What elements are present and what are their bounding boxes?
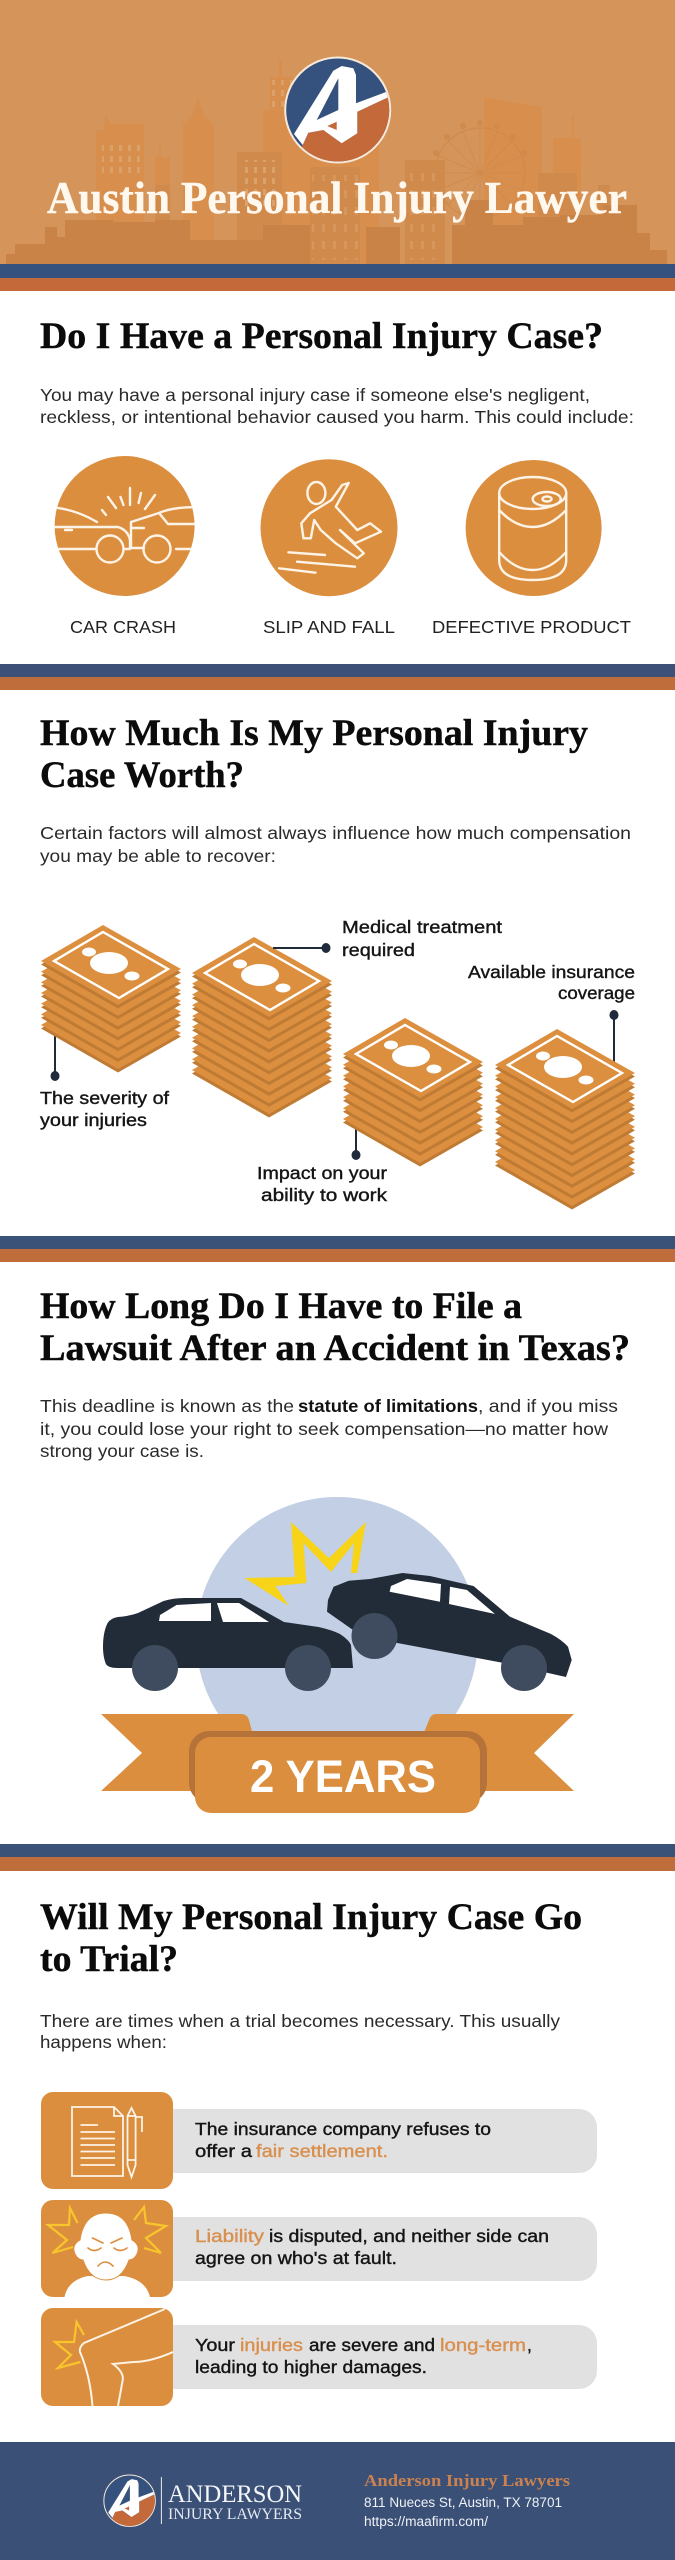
card text: is disputed, and neither side can (269, 2226, 549, 2246)
card text: Your (195, 2335, 235, 2355)
heading: How Much Is My Personal Injury (40, 713, 588, 754)
intro text: you may be able to recover: (40, 846, 276, 866)
label: severity (40, 1088, 169, 1130)
ribbon text: 2 YEARS (250, 1751, 436, 1802)
money stack 2 (192, 937, 332, 1118)
footer contact: https://maafirm.com/ (364, 2514, 488, 2529)
label: ability to work: Impact on your (257, 1163, 387, 1183)
label: insurance coverage (468, 962, 635, 1003)
label: medical treatment (342, 917, 502, 960)
label: insurance coverage: Available insurance (468, 962, 635, 982)
heading (40, 713, 588, 796)
panel: statute of limitations (40, 1286, 630, 1813)
heading: Will My Personal Injury Case Go (40, 1897, 582, 1938)
ribbon (101, 1714, 574, 1813)
card text (195, 2119, 491, 2161)
intro text (40, 823, 631, 866)
intro text: Certain factors will almost always influence how much compensation (40, 823, 631, 843)
icon: car crash (50, 456, 200, 596)
title: Austin Personal Injury Lawyer (47, 173, 627, 223)
card text: The insurance company refuses to (195, 2119, 491, 2139)
label: severity: your injuries (40, 1110, 147, 1130)
footer contact: Anderson Injury Lawyers (364, 2471, 570, 2490)
label: ability to work (257, 1163, 387, 1205)
heading: to Trial? (40, 1939, 178, 1980)
heading (40, 1286, 630, 1369)
intro text: You may have a personal injury case if someone else's negligent, (40, 385, 590, 405)
card text: are severe and (309, 2335, 435, 2355)
label: car crash: CAR CRASH (70, 617, 176, 637)
label: severity: The severity of (40, 1088, 169, 1108)
body text (40, 1396, 618, 1461)
connector: ability to work (352, 1120, 360, 1160)
panel: header (0, 0, 675, 264)
panel: footer (0, 2442, 675, 2560)
connector: insurance coverage (610, 1010, 618, 1064)
body text: This deadline is known as the (40, 1396, 294, 1416)
body text: , and if you miss (478, 1396, 618, 1416)
spark (244, 1522, 366, 1606)
icon: defective product (466, 460, 602, 596)
panel: do I have a case (40, 316, 634, 637)
footer logo: INJURY LAWYERS (168, 2506, 302, 2523)
card text: , (527, 2335, 532, 2355)
label: medical treatment: Medical treatment (342, 917, 502, 937)
card text: agree on who's at fault. (195, 2248, 397, 2268)
card text (195, 2226, 549, 2268)
logo (285, 58, 400, 170)
car right (327, 1573, 572, 1691)
intro text: reckless, or intentional behavior caused you harm. This could include: (40, 407, 634, 427)
card text: injuries (240, 2335, 303, 2355)
footer logo (104, 2475, 302, 2530)
illustration: car collision (101, 1497, 574, 1813)
label: medical treatment: required (342, 940, 415, 960)
footer contact (364, 2471, 570, 2529)
label: slip and fall: SLIP AND FALL (263, 617, 395, 637)
panel: go to trial (40, 1897, 597, 2406)
panel: case worth (40, 713, 635, 1210)
car left (103, 1598, 353, 1691)
card text: leading to higher damages. (195, 2357, 427, 2377)
city skyline (6, 60, 667, 264)
card text: fair settlement. (256, 2141, 388, 2161)
body text: strong your case is. (40, 1441, 204, 1461)
card text: long-term (440, 2335, 526, 2355)
card text: Liability (195, 2226, 264, 2246)
card: fair settlement (41, 2092, 597, 2189)
intro text: There are times when a trial becomes necessary. This usually (40, 2011, 560, 2031)
connector: severity (50, 1030, 60, 1081)
intro text (40, 385, 634, 427)
intro text (40, 2011, 560, 2052)
card: liability (41, 2200, 597, 2297)
heading: How Long Do I Have to File a (40, 1286, 522, 1327)
icon: document and pen (72, 2107, 142, 2177)
heading: Do I Have a Personal Injury Case? (40, 316, 603, 357)
icon: slip and fall (260, 459, 398, 596)
label: defective product: DEFECTIVE PRODUCT (432, 617, 631, 637)
label: insurance coverage: coverage (558, 983, 635, 1003)
footer contact: 811 Nueces St, Austin, TX 78701 (364, 2495, 562, 2510)
connector: medical treatment (273, 943, 330, 953)
footer logo: ANDERSON (168, 2479, 302, 2508)
icon: injured knee (55, 2309, 173, 2406)
heading: Lawsuit After an Accident in Texas? (40, 1328, 630, 1369)
card text: offer a (195, 2141, 252, 2161)
body text: it, you could lose your right to seek compensation—no matter how (40, 1419, 608, 1439)
card text (195, 2335, 532, 2377)
intro text: happens when: (40, 2032, 167, 2052)
money stack 4 (495, 1029, 635, 1210)
body text: statute of limitations (298, 1396, 478, 1416)
label: ability to work: ability to work (261, 1185, 387, 1205)
heading (40, 1897, 582, 1980)
money stack 1 (41, 925, 181, 1072)
icon: frustrated face (48, 2207, 166, 2297)
money stack 3 (343, 1018, 483, 1166)
card: injuries (41, 2308, 597, 2406)
heading: Case Worth? (40, 755, 244, 796)
